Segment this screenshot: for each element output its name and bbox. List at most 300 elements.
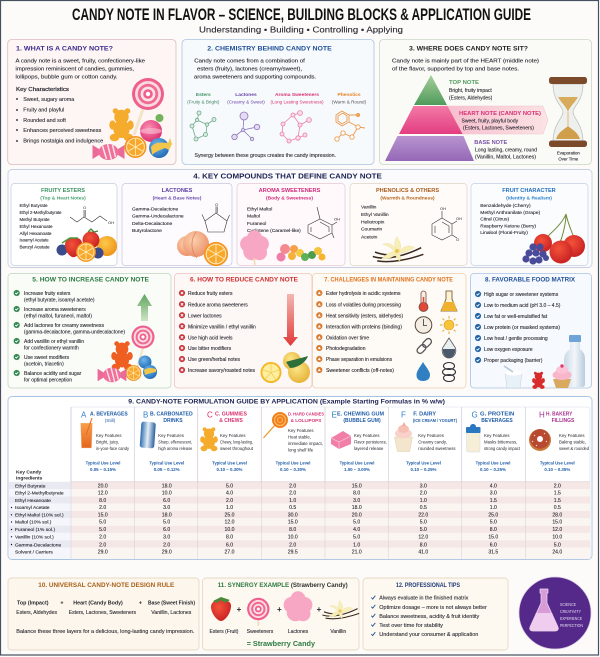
food matrix list: Low protein (or masked systems) bbox=[484, 325, 560, 331]
reduce list: Use high acid levels bbox=[188, 335, 233, 341]
column G: protein beverages: BEVERAGES bbox=[481, 418, 513, 424]
column B: carbonated drinks: Key Features bbox=[158, 433, 184, 438]
phenolics list bbox=[361, 204, 389, 240]
phenolics heading: PHENOLICS & OTHERS bbox=[376, 188, 439, 194]
values: dairy: 5.0 bbox=[420, 527, 427, 533]
reduce list: Reduce aroma sweeteners bbox=[188, 302, 248, 308]
icon: water drop bbox=[416, 362, 430, 381]
aroma sweeteners list: Ethyl Maltol bbox=[247, 206, 272, 212]
column C: gummies and chews bbox=[200, 410, 254, 472]
values: beverages: 15.0 bbox=[98, 512, 108, 518]
icon: clock bbox=[415, 317, 432, 333]
panel 9: formulation guide bbox=[8, 396, 592, 560]
molecule: ester structure bbox=[70, 205, 114, 225]
card: fruity esters bbox=[11, 184, 117, 266]
characteristics list: Rounded and soft bbox=[23, 118, 66, 124]
fruity esters heading bbox=[40, 188, 86, 201]
icon: glass of juice bbox=[80, 418, 92, 448]
icon: molecule chain bbox=[442, 362, 456, 382]
lemons illustration bbox=[260, 352, 310, 383]
panel 5: how to increase candy note bbox=[8, 274, 171, 388]
column B: carbonated drinks: B bbox=[143, 410, 148, 420]
reduce list: Minimize vanillin / ethyl vanillin bbox=[188, 324, 256, 330]
icon: bottle bbox=[564, 335, 585, 387]
values: chewing gum: 5.0 bbox=[353, 534, 360, 540]
values: carbonated drinks: 18.0 bbox=[162, 512, 172, 518]
group: esters bbox=[187, 92, 220, 141]
heart note label: (Esters, Lactones, Sweeteners) bbox=[463, 126, 534, 132]
card: fruit character bbox=[471, 184, 588, 266]
column D: hard candies and lollipops: D. HARD CANDIES bbox=[288, 412, 324, 417]
fruity esters list: Methyl Butyrate bbox=[20, 217, 50, 223]
intro text: Candy note comes from a combination of bbox=[194, 58, 305, 64]
values: protein beverages: 31.5 bbox=[488, 550, 498, 556]
values: bakery fillings: 12.0 bbox=[552, 527, 562, 533]
panel 2: chemistry behind candy note bbox=[182, 40, 374, 164]
values: hard candies: 0.5 bbox=[289, 505, 296, 511]
values: gummies: 8.0 bbox=[226, 534, 233, 540]
column H: bakery fillings: Typical Use Level bbox=[540, 460, 575, 465]
rule layers: + bbox=[139, 600, 142, 606]
molecule: phenolic structure: OH bbox=[456, 216, 462, 221]
column C: gummies and chews: C bbox=[207, 410, 213, 420]
challenges list: Sweetener conflicts (off-notes) bbox=[326, 368, 394, 374]
column D: hard candies and lollipops: long shelf life bbox=[288, 448, 314, 452]
column A: beverages bbox=[80, 410, 130, 472]
hourglass caption: Evaporation bbox=[557, 150, 580, 155]
intro text: Candy note is mainly part of the HEART (middle note) bbox=[392, 58, 539, 64]
values: bakery fillings: 1.5 bbox=[554, 490, 561, 496]
values: beverages bbox=[98, 483, 108, 556]
icon: ice cream cup bbox=[394, 422, 412, 452]
food matrix list: Low fat or well-emulsified fat bbox=[484, 314, 548, 320]
row labels: Ethyl Butyrate bbox=[15, 483, 46, 489]
synergy note: Synergy between these groups creates the candy impression. bbox=[194, 153, 336, 159]
values: carbonated drinks bbox=[162, 483, 172, 556]
column C: gummies and chews: & CHEWS bbox=[219, 418, 243, 424]
values: carbonated drinks: 6.0 bbox=[163, 498, 170, 504]
heart banner bbox=[440, 106, 548, 134]
intro text bbox=[392, 58, 539, 72]
heading 11: 11. SYNERGY EXAMPLE (Strawberry Candy) bbox=[218, 582, 348, 589]
values: hard candies: 30.0 bbox=[288, 512, 298, 518]
tips list: Test over time for stability bbox=[379, 623, 443, 629]
values: gummies: 6.0 bbox=[226, 542, 233, 548]
challenges list: Heat sensitivity (esters, aldehydes) bbox=[326, 313, 403, 319]
column D: hard candies and lollipops bbox=[264, 412, 324, 472]
food matrix list: High sugar or sweetener systems bbox=[484, 292, 559, 298]
values: gummies: 4.0 bbox=[226, 490, 233, 496]
lactones heading: (Heart & Base Notes) bbox=[153, 195, 202, 201]
heading 9: 9. CANDY-NOTE FORMULATION GUIDE BY APPLICATION (Example Starting Formulas in % w/w) bbox=[128, 398, 445, 405]
values: beverages: 2.0 bbox=[99, 534, 106, 540]
result: = Strawberry Candy bbox=[247, 639, 316, 648]
challenges list: Loss of volatiles during processing bbox=[326, 302, 401, 308]
reduce list: Use bitter modifiers bbox=[188, 346, 232, 352]
values: dairy: 22.0 bbox=[418, 512, 428, 518]
molecule: phenolic structure bbox=[432, 206, 462, 242]
column B: carbonated drinks: 0.05 – 0.12% bbox=[154, 467, 180, 472]
fruit character list: Benzaldehyde (Cherry) bbox=[480, 203, 531, 209]
column A: beverages: 0.05 – 0.15% bbox=[90, 467, 116, 472]
panel 3: where does candy note sit bbox=[380, 40, 592, 164]
column F: dairy bbox=[394, 410, 458, 472]
column B: carbonated drinks: Typical Use Level bbox=[149, 460, 184, 465]
column E: chewing gum: E bbox=[332, 410, 337, 420]
column E: chewing gum bbox=[331, 410, 387, 472]
molecule: lactones bbox=[232, 112, 260, 141]
values: gummies: 10.0 bbox=[225, 527, 235, 533]
group: phenolics bbox=[332, 92, 367, 141]
lactones list: Gamma-Undecalactone bbox=[132, 214, 184, 220]
values: bakery fillings: 10.0 bbox=[552, 534, 562, 540]
fruity esters list: Allyl Hexanoate bbox=[20, 231, 52, 237]
increase list: Increase fruity esters bbox=[24, 291, 71, 297]
group: aroma sweeteners: Aroma Sweeteners bbox=[275, 92, 319, 98]
column B: carbonated drinks: B. CARBONATED bbox=[150, 412, 193, 418]
tips list: Always evaluate in the finished matrix bbox=[379, 596, 469, 602]
increase list: (ethyl maltol, furaneol, maltol) bbox=[24, 313, 92, 319]
food matrix list: Low heat / gentle processing bbox=[484, 336, 548, 342]
values: bakery fillings: 5.0 bbox=[554, 542, 561, 548]
heading 7: 7. CHALLENGES IN MAINTAINING CANDY NOTE bbox=[324, 276, 453, 284]
rule layers: Heart (Candy Body) bbox=[73, 600, 123, 606]
plus: + bbox=[277, 605, 282, 614]
values: protein beverages: 4.0 bbox=[490, 483, 497, 489]
candy illustration bbox=[92, 78, 172, 160]
values: dairy: 41.0 bbox=[418, 550, 428, 556]
lactones list bbox=[132, 206, 184, 234]
heart note label: Sweet, fruity, playful body bbox=[462, 118, 519, 124]
challenges list: Ester hydrolysis in acidic systems bbox=[326, 291, 401, 297]
column E: chewing gum: layered release bbox=[354, 446, 384, 451]
icon: oil drop bbox=[442, 338, 456, 358]
reduce list: Reduce fruity esters bbox=[188, 291, 233, 297]
values: carbonated drinks: 6.0 bbox=[163, 527, 170, 533]
fruit character heading bbox=[502, 188, 556, 201]
tips list bbox=[371, 596, 487, 638]
increase list: (acetoin, triacetin) bbox=[24, 361, 64, 367]
column F: dairy: F. DAIRY bbox=[413, 412, 437, 418]
icon: gummy bear bbox=[200, 427, 218, 451]
values: gummies: 27.0 bbox=[225, 550, 235, 556]
column G: protein beverages: Masks bitterness, bbox=[484, 440, 517, 444]
food matrix list: Proper packaging (barrier) bbox=[484, 358, 543, 364]
column A: beverages: A. BEVERAGES bbox=[90, 412, 128, 418]
increase list bbox=[14, 290, 125, 383]
ingredients column heading bbox=[16, 469, 43, 481]
tips list: Optimize dosage – more is not always better bbox=[379, 605, 487, 611]
row labels: Furaneol (1% sol.) bbox=[15, 527, 55, 533]
heading 4: 4. KEY COMPOUNDS THAT DEFINE CANDY NOTE bbox=[193, 173, 382, 180]
values: beverages: 8.0 bbox=[99, 498, 106, 504]
values: chewing gum: 5.0 bbox=[353, 520, 360, 526]
food matrix list: Low to medium acid (pH 3.0 – 4.5) bbox=[484, 303, 561, 309]
component labels: Esters (Fruit) bbox=[210, 629, 239, 635]
values: gummies: 2.0 bbox=[226, 498, 233, 504]
column E: chewing gum: (BUBBLE GUM) bbox=[343, 418, 381, 424]
icon: gum bbox=[331, 431, 351, 449]
icon: donut bbox=[529, 429, 551, 451]
tips list: Understand your consumer & application bbox=[379, 632, 478, 638]
values: gummies: 5.0 bbox=[226, 483, 233, 489]
heart note label bbox=[459, 111, 541, 132]
values: protein beverages bbox=[488, 483, 498, 556]
definition text: lollipops, bubble gum or cotton candy. bbox=[16, 74, 118, 80]
values: dairy: 0.5 bbox=[420, 505, 427, 511]
values: gummies: 12.0 bbox=[225, 520, 235, 526]
values: bakery fillings: 0.5 bbox=[554, 505, 561, 511]
panel 11: synergy example bbox=[202, 578, 359, 650]
column C: gummies and chews: Chewy, long-lasting, bbox=[220, 440, 253, 444]
fruity esters heading: (Top & Heart Notes) bbox=[40, 195, 86, 201]
phenolics list: Vanillin bbox=[361, 204, 377, 210]
characteristics list: Brings nostalgia and indulgence bbox=[23, 138, 103, 144]
column F: dairy: Creamy candy, bbox=[418, 440, 447, 444]
illustration: vanilla bbox=[373, 237, 423, 262]
column A: beverages: Key Features bbox=[96, 433, 122, 438]
rule layers: Esters, Lactones, Sweeteners bbox=[69, 610, 136, 616]
column D: hard candies and lollipops: & LOLLIPOPS bbox=[291, 418, 321, 423]
panel 7: challenges bbox=[312, 274, 466, 388]
row labels: Solvent / Carriers bbox=[15, 550, 53, 556]
plus: + bbox=[317, 605, 322, 614]
column frames bbox=[71, 407, 590, 559]
top note label: TOP NOTE bbox=[449, 80, 479, 86]
values: protein beverages: 6.0 bbox=[490, 542, 497, 548]
hourglass caption: Over Time bbox=[558, 156, 579, 161]
values: hard candies: 15.0 bbox=[288, 520, 298, 526]
rule layers: Vanillin, Lactones bbox=[151, 610, 192, 616]
column D: hard candies and lollipops: immediate impact, bbox=[288, 441, 323, 446]
aroma sweeteners list: Maltol bbox=[247, 214, 260, 220]
group: aroma sweeteners bbox=[270, 92, 324, 143]
values: bakery fillings: 15.0 bbox=[552, 520, 562, 526]
top note label bbox=[449, 80, 493, 101]
icon: sun bbox=[440, 316, 458, 334]
aroma sweeteners list: Cyclotene (Caramel-like) bbox=[247, 228, 301, 234]
heart note label: HEART NOTE (CANDY NOTE) bbox=[459, 111, 541, 117]
group: esters: Esters bbox=[196, 92, 211, 98]
rule layers: Base (Sweet Finish) bbox=[148, 600, 195, 606]
heading 3: 3. WHERE DOES CANDY NOTE SIT? bbox=[409, 46, 528, 53]
icon: strawberry bbox=[211, 597, 231, 621]
phenolics list: Ethyl Vanillin bbox=[361, 212, 389, 218]
challenges list: Interaction with proteins (binding) bbox=[326, 324, 402, 330]
values: chewing gum: 1.0 bbox=[353, 542, 360, 548]
fruit character list: Methyl Anthranilate (Grape) bbox=[480, 210, 540, 216]
values: gummies: 1.0 bbox=[226, 505, 233, 511]
illustration: cotton candy and gummies bbox=[240, 230, 326, 265]
values: beverages: 12.0 bbox=[98, 490, 108, 496]
ingredients column heading: Ingredients bbox=[16, 475, 43, 481]
key characteristics heading: Key Characteristics bbox=[16, 87, 69, 93]
badge words: EXPERIENCE bbox=[560, 616, 582, 621]
rule layers bbox=[16, 600, 195, 616]
intro text: esters (fruity), lactones (creamy/sweet), bbox=[197, 66, 303, 72]
values: hard candies: 2.0 bbox=[289, 490, 296, 496]
values: dairy: 2.0 bbox=[420, 490, 427, 496]
values: protein beverages: 5.0 bbox=[490, 520, 497, 526]
challenges list bbox=[316, 290, 403, 374]
values: carbonated drinks: 3.0 bbox=[163, 505, 170, 511]
column H: bakery fillings: FILLINGS bbox=[552, 418, 575, 424]
values: carbonated drinks: 3.0 bbox=[163, 534, 170, 540]
row labels: Maltol (10% sol.) bbox=[15, 520, 52, 526]
increase list: Increase aroma sweeteners bbox=[24, 307, 86, 313]
phenolics list: Heliotropin bbox=[361, 219, 385, 225]
values: bakery fillings: 1.5 bbox=[554, 498, 561, 504]
column C: gummies and chews: C. GUMMIES bbox=[215, 412, 248, 418]
rule layers: Esters, Aldehydes bbox=[16, 610, 57, 616]
values: chewing gum: 18.0 bbox=[352, 505, 362, 511]
column B: carbonated drinks: Sharp, effervescent, bbox=[158, 440, 192, 444]
panel 4: key compounds bbox=[8, 170, 592, 268]
reduce list: Increase savory/roasted notes bbox=[188, 368, 255, 374]
food matrix list: Low oxygen exposure bbox=[484, 347, 533, 353]
definition text bbox=[16, 58, 145, 80]
values: hard candies: 1.0 bbox=[289, 498, 296, 504]
values: hard candies: 2.0 bbox=[289, 542, 296, 548]
badge: science creativity bbox=[519, 577, 591, 649]
molecule: phenolic structure: O bbox=[456, 237, 459, 242]
row labels: Gamma-Decalactone bbox=[15, 542, 61, 548]
aroma sweeteners list bbox=[247, 206, 301, 234]
candy illustration bbox=[98, 325, 157, 382]
values: hard candies: 2.0 bbox=[289, 483, 296, 489]
challenges list: Photodegradation bbox=[326, 346, 366, 352]
values: dairy: 5.0 bbox=[420, 520, 427, 526]
component labels: Sweeteners bbox=[247, 629, 274, 635]
column F: dairy: 0.10 – 0.25% bbox=[411, 467, 437, 472]
badge words: SCIENCE bbox=[560, 602, 576, 607]
panel 8: favorable food matrix bbox=[470, 274, 592, 389]
values: chewing gum bbox=[352, 483, 362, 556]
icon: thermometer bbox=[419, 291, 428, 312]
lactones list: Gamma-Decalactone bbox=[132, 206, 178, 212]
phenolics list: Coumarin bbox=[361, 226, 382, 232]
values: carbonated drinks: 29.0 bbox=[162, 550, 172, 556]
group: esters: (Fruity & Bright) bbox=[187, 99, 220, 104]
fruit character list bbox=[480, 203, 540, 236]
column A: beverages: A bbox=[81, 410, 87, 420]
base note label: (Vanillin, Maltol, Lactones) bbox=[475, 154, 536, 160]
fruity esters list: Benzyl Acetate bbox=[20, 244, 50, 250]
column G: protein beverages: G bbox=[472, 410, 478, 420]
values: beverages: 2.0 bbox=[99, 542, 106, 548]
molecule: ester structure: OH bbox=[108, 220, 114, 225]
values: bakery fillings bbox=[552, 483, 562, 556]
column D: hard candies and lollipops: Typical Use Level bbox=[276, 460, 310, 465]
column H: bakery fillings: sweet & rounded bbox=[559, 446, 590, 451]
values: carbonated drinks: 5.0 bbox=[163, 520, 170, 526]
values: beverages: 29.0 bbox=[98, 550, 108, 556]
column H: bakery fillings: Baking stable, bbox=[559, 440, 586, 444]
column B: carbonated drinks: high aroma release bbox=[158, 446, 193, 451]
food matrix list bbox=[475, 291, 561, 364]
card: lactones bbox=[122, 184, 232, 266]
values: dairy: 8.0 bbox=[420, 542, 427, 548]
panel 1: what is a candy note bbox=[8, 40, 176, 164]
increase list: Balance acidity and sugar bbox=[24, 371, 82, 377]
column H: bakery fillings: H bbox=[539, 410, 545, 420]
heading 5: 5. HOW TO INCREASE CANDY NOTE bbox=[32, 276, 150, 284]
subtitle: Understanding • Building • Controlling • Applying bbox=[199, 24, 403, 34]
card: phenolics and others bbox=[350, 184, 467, 266]
base note label: BASE NOTE bbox=[474, 140, 507, 146]
values: hard candies: 10.0 bbox=[288, 534, 298, 540]
values: protein beverages: 1.0 bbox=[490, 505, 497, 511]
row labels bbox=[11, 483, 64, 556]
values: dairy: 3.0 bbox=[420, 483, 427, 489]
column B: carbonated drinks: DRINKS bbox=[163, 418, 183, 424]
heading 12: 12. PROFESSIONAL TIPS bbox=[396, 582, 461, 589]
column E: chewing gum: Flavor persistence, bbox=[354, 440, 387, 444]
column E: chewing gum: Typical Use Level bbox=[340, 460, 374, 465]
tips list: Balance sweetness, acidity & fruit identity bbox=[379, 614, 480, 620]
values: carbonated drinks: 10.0 bbox=[162, 490, 172, 496]
badge words: PERFECTION bbox=[560, 623, 583, 628]
column H: bakery fillings bbox=[529, 410, 590, 472]
molecule: phenolics bbox=[335, 111, 365, 141]
molecule: phenolic structure: OH bbox=[440, 206, 446, 211]
column C: gummies and chews: 0.10 – 0.30% bbox=[217, 467, 243, 472]
characteristics list bbox=[16, 97, 103, 144]
fruity esters list: Isoamyl Acetate bbox=[20, 238, 49, 244]
increase list: Use sweet modifiers bbox=[24, 355, 70, 361]
molecule: lactone ring: O bbox=[215, 202, 218, 207]
reduce list: Lower lactones bbox=[188, 313, 222, 319]
lactones list: Butyrolactone bbox=[132, 228, 162, 234]
values: chewing gum: 8.0 bbox=[353, 490, 360, 496]
heading 10: 10. UNIVERSAL CANDY-NOTE DESIGN RULE bbox=[38, 582, 175, 589]
row labels: Ethyl Hexanoate bbox=[15, 498, 51, 504]
icon: orange lollipop bbox=[264, 412, 288, 438]
values: beverages: 2.0 bbox=[99, 505, 106, 511]
values: protein beverages: 15.0 bbox=[488, 534, 498, 540]
card: aroma sweeteners bbox=[237, 184, 345, 266]
icon: cotton candy bbox=[284, 591, 312, 621]
icon: vanilla bbox=[322, 601, 359, 619]
column F: dairy: (ICE CREAM / YOGURT) bbox=[413, 418, 458, 423]
icon: shaker bottle bbox=[466, 424, 480, 452]
molecule: esters bbox=[190, 111, 216, 141]
arrow up bbox=[137, 294, 152, 321]
values: hard candies bbox=[288, 483, 298, 556]
values: dairy: 1.0 bbox=[420, 498, 427, 504]
base note label: Long lasting, creamy, round bbox=[475, 148, 537, 154]
values: carbonated drinks: 18.0 bbox=[162, 483, 172, 489]
aroma sweeteners heading bbox=[259, 188, 321, 201]
column C: gummies and chews: Typical Use Level bbox=[212, 460, 247, 465]
fruity esters list bbox=[20, 203, 62, 250]
phenolics heading: (Warmth & Roundness) bbox=[380, 195, 435, 201]
values: dairy bbox=[418, 483, 428, 556]
values: bakery fillings: 24.0 bbox=[552, 550, 562, 556]
fruity esters list: Ethyl 2-Methylbutyrate bbox=[20, 210, 62, 216]
fruit character list: Citral (Citrus) bbox=[480, 216, 509, 222]
icon: red gummy bear bbox=[532, 372, 545, 389]
intro text: of the flavor, supported by top and base notes. bbox=[392, 66, 519, 72]
values: protein beverages: 1.5 bbox=[490, 498, 497, 504]
values: protein beverages: 25.0 bbox=[488, 512, 498, 518]
increase list: Add lactones for creamy sweetness bbox=[24, 323, 104, 329]
illustration: peach and orange bbox=[177, 231, 228, 266]
fruit character heading: (Identity & Realism) bbox=[506, 195, 552, 201]
icon: flask bbox=[530, 589, 558, 631]
column G: protein beverages: Typical Use Level bbox=[476, 460, 510, 465]
characteristics list: Enhances perceived sweetness bbox=[23, 128, 102, 134]
